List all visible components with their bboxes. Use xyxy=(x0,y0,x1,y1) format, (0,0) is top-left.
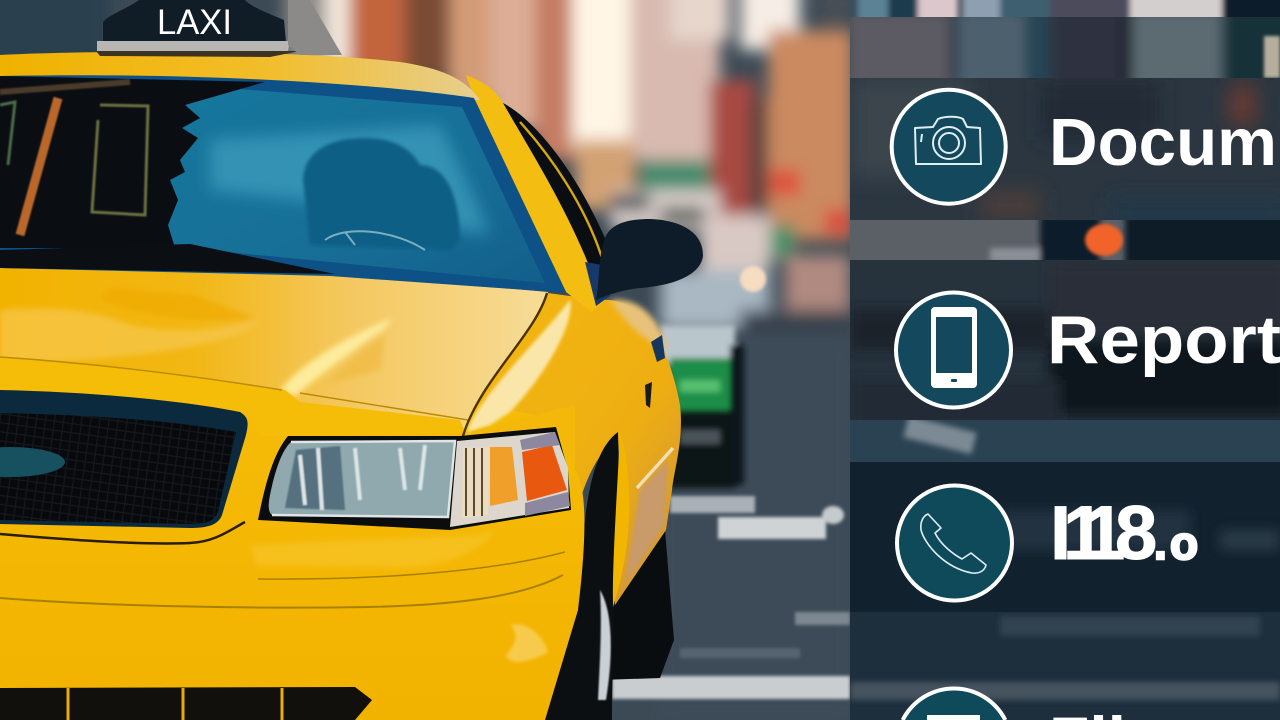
A pillar xyxy=(466,75,605,312)
row: report xyxy=(896,292,1280,408)
icon: file xyxy=(903,688,1005,720)
front tyre xyxy=(545,432,618,720)
row 1 background xyxy=(850,78,1280,228)
strip below row 2 xyxy=(850,416,1280,462)
icon: camera xyxy=(892,90,1006,204)
bumper seams xyxy=(258,552,565,579)
wiper xyxy=(0,244,335,274)
row: file xyxy=(903,688,1163,720)
icon: phone handset xyxy=(897,486,1012,600)
row: document xyxy=(892,90,1277,204)
label: number: I118 xyxy=(1050,491,1157,576)
lower band xyxy=(850,612,1280,720)
front grille xyxy=(0,390,248,528)
taxi roof sign: LAXI xyxy=(157,3,232,42)
side window xyxy=(503,103,606,268)
bumper highlight xyxy=(250,530,495,568)
side mirror xyxy=(585,219,703,306)
lower grille xyxy=(0,687,372,720)
upper band xyxy=(850,17,1280,78)
steering wheel xyxy=(325,231,425,250)
door highlight and trim xyxy=(610,300,668,350)
traffic light glow xyxy=(740,266,766,292)
windshield glass xyxy=(155,85,545,283)
roof xyxy=(0,52,480,100)
hood lower panel xyxy=(0,358,465,436)
interior reflections xyxy=(0,82,148,235)
fender highlight xyxy=(467,300,571,432)
row 2 background xyxy=(850,260,1280,430)
fender and door xyxy=(460,292,681,608)
panel: contact sidebar xyxy=(845,0,1280,720)
hood reflections xyxy=(0,287,392,396)
headrest silhouette xyxy=(303,138,460,250)
lower front body xyxy=(0,385,584,720)
green car behind taxi xyxy=(660,325,744,488)
road markings xyxy=(612,496,850,699)
hood xyxy=(0,262,548,436)
blurred city street background xyxy=(0,0,853,720)
taxi xyxy=(0,0,703,720)
row: phone number xyxy=(897,486,1198,600)
windshield reflections xyxy=(210,125,490,235)
icon: smartphone xyxy=(896,292,1011,408)
row 3 background xyxy=(850,462,1280,612)
headlight xyxy=(258,427,571,530)
strip with car light xyxy=(850,220,1280,260)
label: Document: Docum xyxy=(1049,105,1277,180)
top strip xyxy=(850,0,1280,17)
dark tree reflection xyxy=(0,76,265,248)
road xyxy=(736,330,743,338)
grille lower trim line xyxy=(0,522,245,543)
windshield xyxy=(0,75,566,292)
label: Report: Report xyxy=(1047,302,1280,378)
rear tyre shadow xyxy=(600,530,674,680)
taxi roof sign xyxy=(96,0,342,57)
wheel rim xyxy=(598,590,611,700)
fender wheel-arch lip xyxy=(613,433,629,607)
label: number: .o xyxy=(1154,517,1198,569)
hood seams xyxy=(0,357,468,420)
